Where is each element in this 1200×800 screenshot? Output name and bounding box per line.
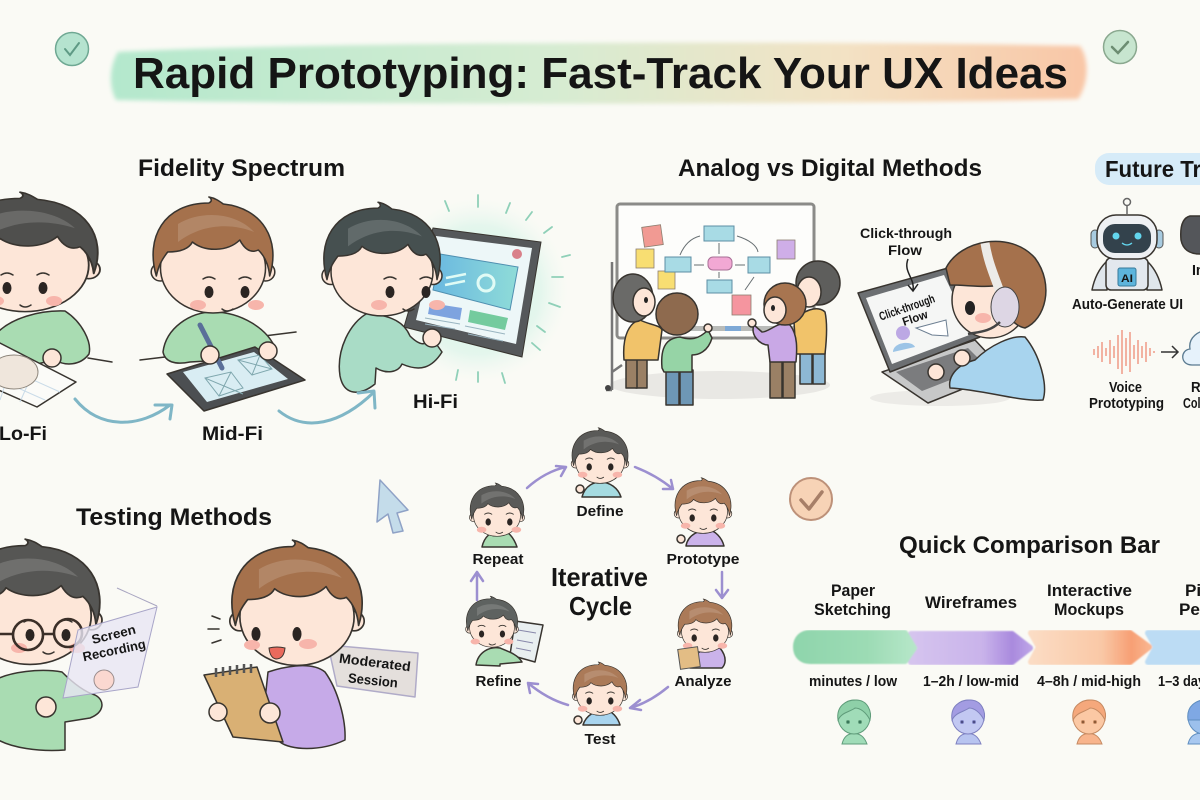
sub: step Analyze — [674, 599, 733, 690]
sub: body — [339, 313, 442, 392]
comparison: Paper Sketching — [809, 581, 897, 690]
icon: AI robot — [1091, 198, 1163, 290]
sub: segment green — [796, 633, 914, 661]
sub: session tag: Moderated — [338, 651, 412, 674]
sub: segment purple — [911, 634, 1030, 662]
sub: step Refine — [466, 596, 543, 690]
sub: step Test — [572, 662, 628, 748]
icon: green check left — [56, 32, 88, 66]
sub: head — [322, 202, 442, 316]
sub: face — [244, 627, 317, 659]
sub: body — [0, 670, 102, 750]
sub: head — [0, 539, 102, 664]
comparison: Wireframes: 1–2h / low-mid — [923, 673, 1019, 690]
sub: laptop — [858, 268, 1010, 406]
sub: paper sketch — [0, 340, 76, 407]
laptop user group — [858, 225, 1046, 406]
kid with notepad: moderated session — [204, 540, 418, 748]
glasses kid: screen recording — [0, 539, 157, 750]
Hi-Fi kid with glowing tablet — [322, 195, 570, 392]
sub: caption Click-through Flow: Flow — [888, 242, 922, 258]
sub: step Define — [571, 428, 629, 520]
sub: head — [946, 241, 1046, 338]
sub: step Refine: Refine — [476, 673, 522, 690]
comparison: Interactive Mockups: Mockups — [1054, 600, 1124, 619]
sub: cycle arrows — [471, 466, 728, 710]
comparison: Wireframes — [923, 593, 1019, 690]
sub: glow rays — [445, 195, 570, 383]
sub: tablet — [167, 347, 305, 411]
sub: hologram panel: Screen — [90, 622, 137, 647]
face: green — [838, 700, 870, 744]
Mid-Fi kid — [140, 197, 305, 411]
label: Mid-Fi: Mid-Fi — [202, 424, 263, 445]
sub: hand — [43, 349, 61, 367]
sub: caption Click-through Flow — [860, 225, 952, 258]
sub: caption Click-through Flow: Click-through — [860, 225, 952, 241]
comparison: Interactive Mockups: Interactive — [1047, 581, 1132, 600]
comparison bar — [796, 633, 1200, 662]
sub: cycle title: Cycle — [569, 591, 632, 621]
sub: head — [151, 197, 275, 313]
heading: Analog vs Digital Methods: Analog vs Digital Methods — [678, 155, 982, 182]
sub: segment orange — [1031, 633, 1149, 662]
sub: notepad — [204, 664, 283, 742]
icon: orange check — [790, 478, 832, 520]
icon: cursor — [377, 480, 408, 533]
sub: face — [371, 277, 445, 311]
sub: body — [0, 311, 90, 372]
sub: step Prototype — [666, 478, 740, 568]
icon: VR headset — [1181, 216, 1200, 254]
sub: hologram panel — [63, 588, 157, 698]
sub: flow arrows — [680, 236, 758, 290]
sub: session tag: Session — [347, 670, 399, 691]
sub: glow — [388, 198, 568, 382]
sub: flow arrow — [907, 259, 918, 291]
comparison: Paper Sketching: minutes / low — [809, 673, 897, 690]
sub: step Test: Test — [584, 731, 616, 748]
sub: step Repeat — [469, 483, 525, 568]
sub: glasses — [0, 619, 82, 650]
heading: Quick Comparison Bar: Quick Comparison Bar — [899, 532, 1160, 559]
sub: board — [605, 204, 814, 391]
icon: voice waveform — [1094, 330, 1154, 374]
sub: person yellow back — [794, 261, 840, 384]
label: Auto-Generate UI: Auto-Generate UI — [1072, 297, 1183, 313]
sub: hologram panel: Recording — [81, 636, 147, 664]
sub: body — [163, 312, 276, 363]
arrow: Lo-Fi to Mid-Fi — [75, 399, 172, 422]
face: purple — [952, 700, 984, 744]
label: Voice Prototyping: Prototyping — [1089, 396, 1164, 412]
sub: hands — [209, 703, 227, 721]
sub: person green back — [656, 293, 712, 405]
sub: face — [190, 277, 264, 311]
sub: tablet — [404, 228, 541, 357]
sub: flow boxes — [665, 226, 770, 293]
sub: screen text: Click-through — [877, 291, 937, 324]
heading: Fidelity Spectrum: Fidelity Spectrum — [138, 155, 345, 182]
sub: headphones — [968, 243, 1019, 334]
sub: person left — [613, 274, 662, 388]
sub: hand — [423, 329, 441, 347]
arrow: voice to cloud — [1161, 346, 1178, 358]
sub: face — [0, 273, 62, 307]
whiteboard group — [605, 204, 840, 405]
sub: step Define: Define — [576, 503, 624, 520]
sub: face — [11, 620, 85, 654]
sub: head — [0, 192, 100, 312]
comparison: Pixel Perfect — [1158, 581, 1200, 690]
label: Hi-Fi: Hi-Fi — [413, 392, 458, 413]
comparison: Interactive Mockups — [1037, 581, 1141, 690]
sub: cycle title — [551, 562, 648, 621]
icon: green check right — [1104, 30, 1136, 64]
sub: body — [950, 337, 1044, 400]
label: Lo-Fi: Lo-Fi — [0, 424, 47, 445]
sub: laptop: Flow — [900, 307, 930, 329]
sub: body — [265, 666, 345, 748]
sub: session tag — [328, 645, 418, 697]
heading: Testing Methods: Testing Methods — [76, 504, 272, 531]
sub: step Prototype: Prototype — [666, 551, 740, 568]
sub: sticky notes — [636, 225, 795, 315]
arrow: Mid-Fi to Hi-Fi — [279, 391, 375, 423]
comparison: Paper Sketching: Paper — [831, 581, 875, 600]
icon: AI robot: AI — [1121, 273, 1133, 285]
sub: hands — [954, 350, 970, 366]
sub: head — [230, 540, 364, 665]
title banner: Rapid Prototyping: Fast-Track Your UX Ideas — [133, 49, 1068, 98]
sub: pen and hands — [200, 325, 277, 368]
sub: person purple — [748, 283, 806, 398]
label: Voice Prototyping — [1089, 380, 1164, 412]
iterative cycle — [466, 428, 740, 748]
label: Real-time Collab — [1183, 380, 1200, 412]
sub: segment blue — [1148, 633, 1200, 662]
Lo-Fi kid — [0, 192, 112, 407]
comparison: Wireframes: Wireframes — [925, 593, 1017, 612]
sub: cycle title: Iterative — [551, 562, 648, 592]
sub: step Analyze: Analyze — [674, 673, 732, 690]
sub: speech lines — [208, 616, 221, 643]
icon: cloud — [1183, 330, 1200, 365]
face: orange — [1073, 700, 1105, 744]
sub: hands — [36, 670, 114, 717]
sub: floor shadow — [610, 371, 830, 399]
label: Voice Prototyping: Voice — [1109, 380, 1142, 396]
comparison: Paper Sketching: Sketching — [814, 600, 891, 619]
comparison: Interactive Mockups: 4–8h / mid-high — [1037, 673, 1141, 690]
sub: step Repeat: Repeat — [472, 551, 524, 568]
face: blue — [1188, 700, 1200, 744]
